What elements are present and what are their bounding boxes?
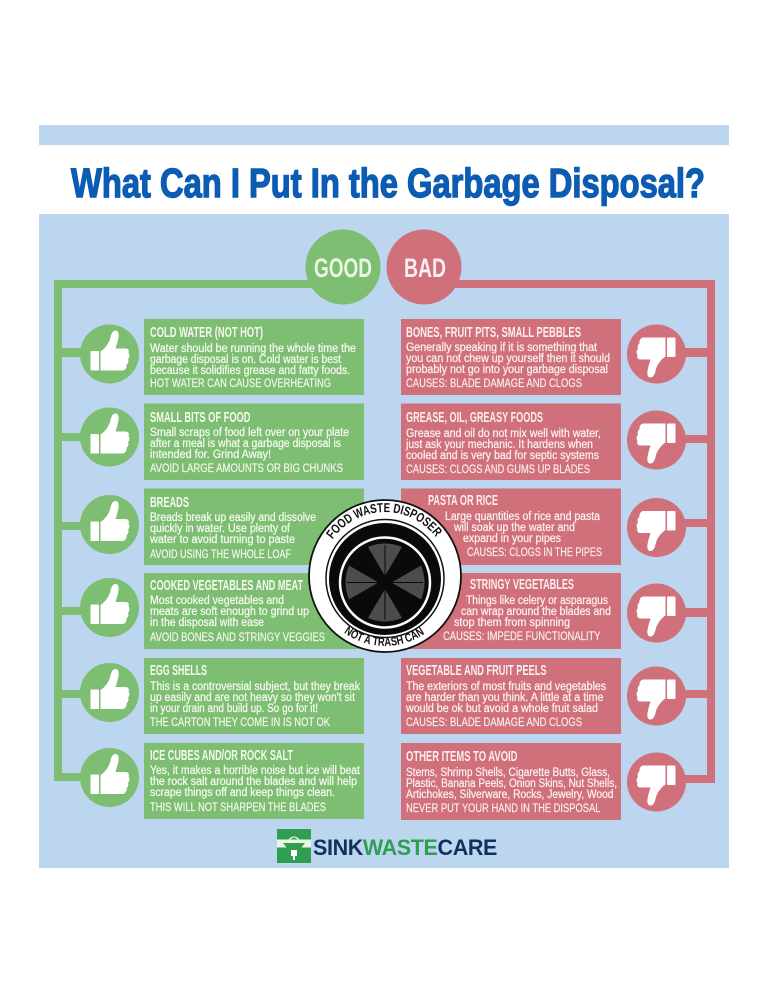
- panel: egg shells: [144, 658, 364, 734]
- panel: stringy vegetables: Things like celery or asparagus: [466, 595, 608, 607]
- icon: thumbs down 5: [627, 666, 686, 726]
- panel: pasta or rice: will soak up the water and: [453, 522, 575, 534]
- panel: small bits of food: intended for. Grind Away!: [150, 449, 271, 461]
- panel: egg shells: EGG SHELLS: [150, 663, 207, 679]
- panel: breads: BREADS: [150, 495, 189, 511]
- panel: egg shells: in your drain and build up. So go for it!: [150, 703, 318, 715]
- panel: stringy vegetables: can wrap around the blades and: [461, 606, 611, 618]
- connector: good: [54, 280, 343, 781]
- panel: other items to avoid: Artichokes, Silverware, Rocks, Jewelry, Wood: [406, 789, 614, 801]
- panel: grease, oil, greasy foods: just ask your mechanic. It hardens when: [405, 439, 593, 451]
- panel: bones, fruit pits, small pebbles: Generally speaking if it is something that: [406, 342, 598, 354]
- panel: other items to avoid: Stems, Shrimp Shells, Cigarette Butts, Glass,: [406, 767, 610, 779]
- panel: cold water: garbage disposal is on. Cold water is best: [150, 354, 342, 366]
- panel: pasta or rice: PASTA OR RICE: [428, 493, 498, 509]
- panel: cold water: because it solidifies grease and fatty foods.: [150, 365, 350, 377]
- icon: thumbs up 3: [80, 495, 139, 554]
- bad heading: [386, 230, 462, 304]
- panel: vegetable and fruit peels: [401, 658, 621, 734]
- panel: other items to avoid: [401, 743, 621, 820]
- panel: small bits of food: Small scraps of food left over on your plate: [150, 427, 349, 439]
- panel: egg shells: THE CARTON THEY COME IN IS NOT OK: [150, 717, 330, 729]
- panel: breads: [144, 488, 364, 565]
- panel: vegetable and fruit peels: CAUSES: BLADE DAMAGE AND CLOGS: [406, 717, 582, 729]
- panel: small bits of food: after a meal is what a garbage disposal is: [150, 438, 341, 450]
- panel: grease, oil, greasy foods: GREASE, OIL, GREASY FOODS: [406, 410, 543, 426]
- icon: thumbs down 3: [627, 498, 686, 557]
- panel: breads: water to avoid turning to paste: [149, 534, 295, 546]
- panel: ice cubes and rock salt: Yes, it makes a horrible noise but ice will beat: [150, 765, 361, 777]
- badge bottom text: NOT A TRASH CAN: [344, 626, 424, 646]
- icon: thumbs down 2: [627, 410, 686, 470]
- panel: cooked vegetables and meat: COOKED VEGETABLES AND MEAT: [150, 578, 303, 594]
- panel: bones, fruit pits, small pebbles: CAUSES: BLADE DAMAGE AND CLOGS: [406, 378, 582, 390]
- panel: breads: quickly in water. Use plenty of: [150, 523, 291, 535]
- panel: vegetable and fruit peels: VEGETABLE AND FRUIT PEELS: [406, 663, 547, 679]
- badge top text: FOOD WASTE DISPOSER: [326, 503, 442, 539]
- panel: pasta or rice: CAUSES: CLOGS IN THE PIPES: [467, 547, 602, 559]
- panel: other items to avoid: OTHER ITEMS TO AVOID: [406, 749, 518, 765]
- panel: pasta or rice: Large quantities of rice and pasta: [445, 511, 601, 523]
- panel: cold water: Water should be running the whole time the: [150, 343, 356, 355]
- good heading: GOOD: [314, 253, 372, 283]
- panel: pasta or rice: [401, 488, 621, 565]
- icon: thumbs down 4: [627, 584, 686, 642]
- panel: bones, fruit pits, small pebbles: BONES, FRUIT PITS, SMALL PEBBLES: [406, 325, 581, 341]
- icon: thumbs down 6: [627, 752, 686, 812]
- logo: sink waste care: [277, 829, 497, 863]
- connector: bad: [424, 280, 715, 783]
- panel: vegetable and fruit peels: The exteriors of most fruits and vegetables: [406, 681, 606, 693]
- panel: other items to avoid: Plastic, Banana Peels, Onion Skins, Nut Shells,: [406, 778, 617, 790]
- panel: egg shells: This is a controversial subject, but they break: [150, 681, 360, 693]
- good heading: [306, 230, 380, 304]
- panel: cooked vegetables and meat: Most cooked vegetables and: [150, 595, 284, 607]
- bad heading: BAD: [404, 253, 446, 283]
- panel: bones, fruit pits, small pebbles: probably not go into your garbage disposal: [406, 364, 608, 376]
- panel: vegetable and fruit peels: would be ok but avoid a whole fruit salad: [405, 703, 598, 715]
- panel: vegetable and fruit peels: are harder than you think. A little at a time: [406, 692, 604, 704]
- panel: pasta or rice: expand in your pipes: [463, 533, 561, 545]
- panel: grease, oil, greasy foods: CAUSES: CLOGS AND GUMS UP BLADES: [406, 464, 590, 476]
- panel: cooked vegetables and meat: [144, 573, 364, 649]
- icon: disposer blades: [346, 544, 424, 622]
- top band: [39, 125, 729, 145]
- panel: stringy vegetables: STRINGY VEGETABLES: [470, 577, 574, 593]
- panel: other items to avoid: NEVER PUT YOUR HAND IN THE DISPOSAL: [406, 803, 601, 815]
- panel: cooked vegetables and meat: meats are soft enough to grind up: [150, 606, 309, 618]
- panel: small bits of food: SMALL BITS OF FOOD: [150, 410, 250, 426]
- panel: bones, fruit pits, small pebbles: you can not chew up yourself then it should: [406, 353, 610, 365]
- panel: egg shells: up easily and are not heavy so they won't sit: [150, 692, 356, 704]
- panel: grease, oil, greasy foods: [401, 404, 621, 480]
- badge: food waste disposer: [308, 499, 462, 653]
- icon: thumbs up 6: [80, 748, 139, 807]
- logo wordmark: SINKWASTECARE: [313, 835, 497, 860]
- panel: stringy vegetables: CAUSES: IMPEDE FUNCTIONALITY: [443, 631, 601, 643]
- icon: logo sink: [277, 829, 311, 863]
- icon: thumbs up 2: [80, 408, 139, 466]
- panel: cold water: [144, 319, 364, 395]
- panel: ice cubes and rock salt: the rock salt around the blades and will help: [150, 776, 357, 788]
- panel: cold water: HOT WATER CAN CAUSE OVERHEATING: [150, 378, 331, 390]
- panel: grease, oil, greasy foods: cooled and is very bad for septic systems: [406, 450, 599, 462]
- panel: ice cubes and rock salt: THIS WILL NOT SHARPEN THE BLADES: [150, 802, 326, 814]
- panel: bones, fruit pits, small pebbles: [401, 319, 621, 395]
- panel: stringy vegetables: stop them from spinning: [454, 617, 570, 629]
- panel: grease, oil, greasy foods: Grease and oil do not mix well with water,: [406, 428, 601, 440]
- panel: small bits of food: AVOID LARGE AMOUNTS OR BIG CHUNKS: [150, 463, 343, 475]
- icon: thumbs up 4: [80, 578, 139, 637]
- panel: breads: AVOID USING THE WHOLE LOAF: [150, 549, 291, 561]
- panel: cold water: COLD WATER (NOT HOT): [150, 325, 263, 341]
- panel: ice cubes and rock salt: scrape things off and keep things clean.: [150, 787, 335, 799]
- panel: stringy vegetables: [401, 573, 621, 649]
- icon: thumbs up 5: [80, 663, 139, 722]
- panel: breads: Breads break up easily and dissolve: [150, 512, 316, 524]
- panel: cooked vegetables and meat: AVOID BONES AND STRINGY VEGGIES: [150, 632, 325, 644]
- panel: small bits of food: [144, 404, 364, 480]
- icon: thumbs down 1: [627, 324, 686, 384]
- panel: ice cubes and rock salt: [144, 743, 364, 819]
- panel: ice cubes and rock salt: ICE CUBES AND/OR ROCK SALT: [150, 748, 293, 764]
- icon: thumbs up 1: [80, 324, 139, 384]
- panel: cooked vegetables and meat: in the disposal with ease: [150, 617, 264, 629]
- main panel background: [39, 214, 729, 868]
